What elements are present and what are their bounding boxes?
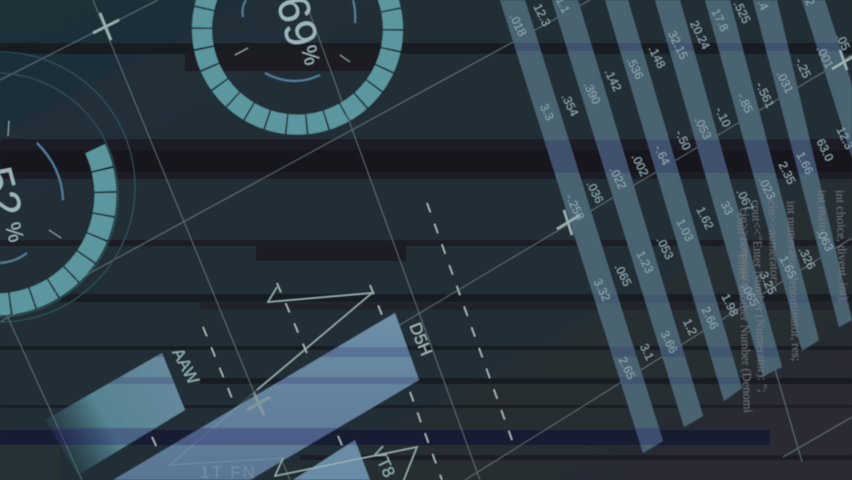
- data table numbers: 1.65: [777, 253, 800, 281]
- dashed guide lines: [152, 203, 512, 480]
- data table numbers: 1.23: [634, 248, 657, 276]
- data table numbers: -.25: [792, 56, 814, 81]
- data table numbers: .063: [814, 226, 837, 254]
- tick marks 52%: [8, 121, 61, 238]
- data table numbers: .018: [507, 11, 530, 39]
- data table numbers: 33: [718, 199, 736, 217]
- source code text: cin>>numerator;: [737, 208, 754, 292]
- crosshair markers: [93, 13, 852, 415]
- percent sign 52%: %: [0, 219, 29, 245]
- data table numbers: 2.35: [776, 159, 799, 187]
- data table numbers: .022: [607, 164, 630, 192]
- data table numbers: 2.66: [699, 304, 722, 332]
- bar chart: AAW bar: [45, 353, 185, 475]
- data table numbers: .065: [612, 261, 635, 289]
- data table numbers: .053: [692, 114, 715, 142]
- inner arcs 52%: [0, 143, 63, 263]
- data table numbers: 20.24: [687, 18, 713, 52]
- data table numbers: .142: [602, 66, 625, 94]
- data table numbers: .354: [559, 91, 582, 119]
- data table numbers: -.561: [753, 80, 777, 111]
- source code text: int main(): [815, 190, 831, 240]
- ring segments 52%: [0, 149, 105, 304]
- line chart: [170, 287, 417, 480]
- data table numbers: .023: [756, 174, 779, 202]
- data table numbers: 63.0: [814, 136, 837, 164]
- percent sign 69%: %: [296, 42, 325, 68]
- bar chart: D5H bar: [113, 313, 419, 480]
- data table numbers: .001: [814, 43, 837, 71]
- data table numbers: -.10: [712, 105, 734, 130]
- data table numbers: .067: [734, 186, 757, 214]
- data table numbers: .148: [646, 43, 669, 71]
- data table numbers: 3.3: [537, 101, 557, 123]
- source code text: int choice, divent, int);: [833, 190, 851, 304]
- source code text: cout<<"Enter Number (Numerator): ";: [749, 200, 770, 393]
- data table numbers: [507, 0, 852, 382]
- data table numbers: 3.66: [658, 328, 681, 356]
- ring segments 69%: [202, 0, 393, 125]
- inner arcs 69%: [242, 0, 355, 81]
- data table numbers: 1.98: [719, 291, 742, 319]
- source code text: [734, 190, 851, 414]
- data table numbers: 17.8: [709, 6, 732, 34]
- data table numbers: -.50: [672, 128, 694, 153]
- faint outer circles: [0, 52, 135, 322]
- tick marks 69%: [235, 48, 350, 62]
- source code text: cin>>numerator;: [765, 200, 782, 284]
- label D5H: D5H: [405, 320, 436, 359]
- data table numbers: -.258: [563, 192, 587, 223]
- source code text: int numerator, denominator, res;: [784, 201, 804, 361]
- data table numbers: .031: [774, 68, 797, 96]
- panel: slanted data bars: [500, 0, 852, 453]
- label AAW: AAW: [168, 345, 203, 388]
- data table numbers: 1.62: [694, 204, 717, 232]
- data table numbers: 1.66: [794, 149, 817, 177]
- data table numbers: .536: [624, 54, 647, 82]
- data table numbers: 3.1: [637, 341, 657, 363]
- data table numbers: .326: [796, 244, 819, 272]
- data table numbers: -.64: [651, 143, 673, 168]
- data table numbers: 2.65: [616, 354, 639, 382]
- panel: ring gauge 69%: [202, 0, 393, 125]
- data table numbers: 1.03: [674, 216, 697, 244]
- data table numbers: .065: [739, 281, 762, 309]
- data table numbers: 3.32: [591, 276, 614, 304]
- data table numbers: .053: [654, 234, 677, 262]
- source code text: cout<<"Enter another Number (Denomi: [734, 213, 755, 414]
- panel: ring gauge 52%: [0, 52, 135, 322]
- data table numbers: .036: [584, 178, 607, 206]
- data table numbers: 12.3: [531, 1, 554, 29]
- data table numbers: 3.25: [757, 269, 780, 297]
- data table numbers: .390: [581, 79, 604, 107]
- data table numbers: 1.2: [680, 316, 700, 338]
- data table numbers: 32.15: [665, 28, 691, 62]
- bar chart: third bar: [293, 440, 370, 480]
- data table numbers: .002: [629, 151, 652, 179]
- data table numbers: -.85: [734, 91, 756, 116]
- label third bar: VT8: [368, 444, 399, 480]
